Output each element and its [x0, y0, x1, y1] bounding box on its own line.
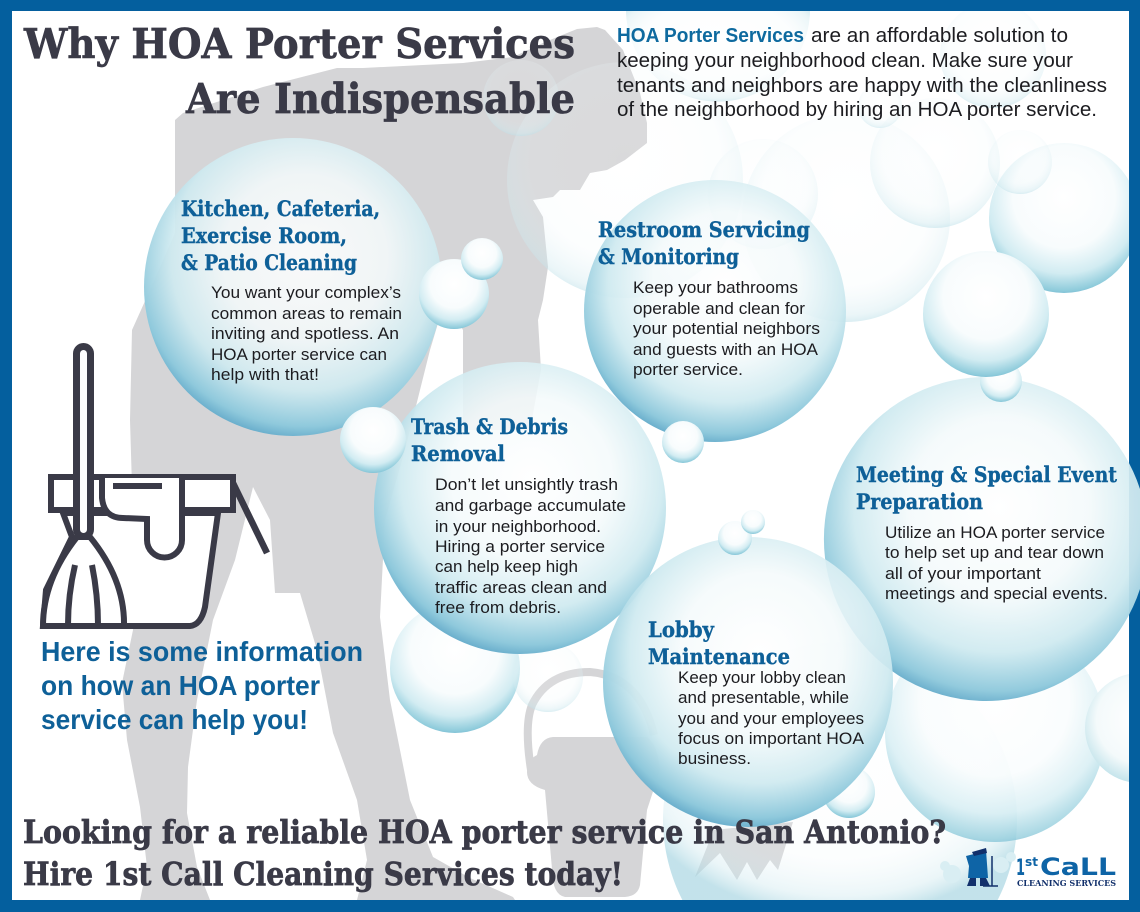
small connecting bubbles [340, 238, 1049, 555]
subheading: here is some information: on how an HOA porter [41, 670, 320, 701]
text: lobby [678, 668, 865, 768]
text: kitchen: You want your complex’s [211, 283, 401, 302]
text: kitchen: common areas to remain [211, 304, 402, 323]
icon: mop and bucket [43, 346, 267, 626]
heading: lobby [648, 618, 790, 670]
intro paragraph: of the neighborhood by hiring an HOA porter service. [617, 98, 1097, 121]
background bubbles [390, 0, 1140, 905]
text: restroom [633, 278, 820, 379]
text: trash [435, 475, 626, 617]
subheading: here is some information: service can help you! [41, 704, 308, 735]
text: trash: Don’t let unsightly trash [435, 475, 618, 494]
text: restroom: porter service. [633, 360, 743, 379]
intro paragraph: are an affordable solution to [811, 24, 1068, 47]
text: lobby: you and your employees [678, 709, 864, 728]
heading: trash [411, 415, 568, 467]
logo: 1st Call Cleaning Services: 1 [1016, 856, 1025, 881]
call to action: Hire 1st Call Cleaning Services today! [23, 855, 623, 893]
bubble: trash [374, 362, 666, 654]
call to action [23, 813, 946, 893]
heading: meeting: Preparation [856, 490, 983, 515]
text: meeting: to help set up and tear down [885, 543, 1104, 562]
text: lobby: and presentable, while [678, 688, 849, 707]
text: restroom: your potential neighbors [633, 319, 820, 338]
bubble: lobby [603, 537, 893, 827]
text: lobby: Keep your lobby clean [678, 668, 846, 687]
text: kitchen: help with that! [211, 365, 319, 384]
heading: restroom [598, 218, 810, 270]
logo: 1st Call Cleaning Services: CLEANING SERVICES [1017, 879, 1116, 889]
text: restroom: operable and clean for [633, 299, 805, 318]
text: meeting: all of your important [885, 564, 1041, 583]
heading: kitchen: & Patio Cleaning [181, 251, 357, 276]
text: meeting [885, 523, 1108, 603]
logo: 1st Call Cleaning Services [940, 848, 1116, 889]
heading: kitchen: Exercise Room, [181, 224, 347, 249]
heading: kitchen [181, 197, 380, 276]
intro paragraph: tenants and neighbors are happy with the cleanliness [617, 74, 1107, 97]
heading: meeting [856, 463, 1117, 515]
text: meeting: meetings and special events. [885, 584, 1108, 603]
heading: kitchen: Kitchen, Cafeteria, [181, 197, 380, 222]
text: kitchen: inviting and spotless. An [211, 324, 399, 343]
bubble: restroom [584, 180, 846, 442]
text: restroom: and guests with an HOA [633, 340, 819, 359]
logo: 1st Call Cleaning Services: st [1025, 855, 1038, 869]
text: lobby: business. [678, 749, 751, 768]
text: kitchen: HOA porter service can [211, 345, 387, 364]
subheading: here is some information [41, 636, 363, 735]
text: trash: traffic areas clean and [435, 578, 607, 597]
title [23, 20, 575, 123]
text: lobby: focus on important HOA [678, 729, 865, 748]
heading: restroom: & Monitoring [598, 245, 739, 270]
text: kitchen [211, 283, 402, 384]
text: trash: can help keep high [435, 557, 578, 576]
text: trash: in your neighborhood. [435, 517, 601, 536]
heading: lobby: Maintenance [648, 645, 790, 670]
bubble: kitchen [144, 138, 442, 436]
title: Why HOA Porter Services [23, 20, 575, 68]
text: trash: and garbage accumulate [435, 496, 626, 515]
heading: lobby: Lobby [648, 618, 714, 643]
text: trash: Hiring a porter service [435, 537, 605, 556]
text: meeting: Utilize an HOA porter service [885, 523, 1105, 542]
intro paragraph: HOA Porter Services [617, 24, 804, 47]
heading: trash: Removal [411, 442, 505, 467]
title: Are Indispensable [185, 75, 575, 123]
intro paragraph [617, 24, 1107, 121]
subheading: here is some information: Here is some information [41, 636, 363, 667]
heading: restroom: Restroom Servicing [598, 218, 810, 243]
logo: 1st Call Cleaning Services: CaLL [1040, 853, 1116, 881]
heading: trash: Trash & Debris [411, 415, 568, 440]
intro paragraph: keeping your neighborhood clean. Make sure your [617, 49, 1073, 72]
bubble: meeting [824, 377, 1140, 701]
text: trash: free from debris. [435, 598, 561, 617]
call to action: Looking for a reliable HOA porter service in San Antonio? [23, 813, 946, 851]
silhouette: bent-over porter [122, 27, 793, 900]
text: restroom: Keep your bathrooms [633, 278, 798, 297]
